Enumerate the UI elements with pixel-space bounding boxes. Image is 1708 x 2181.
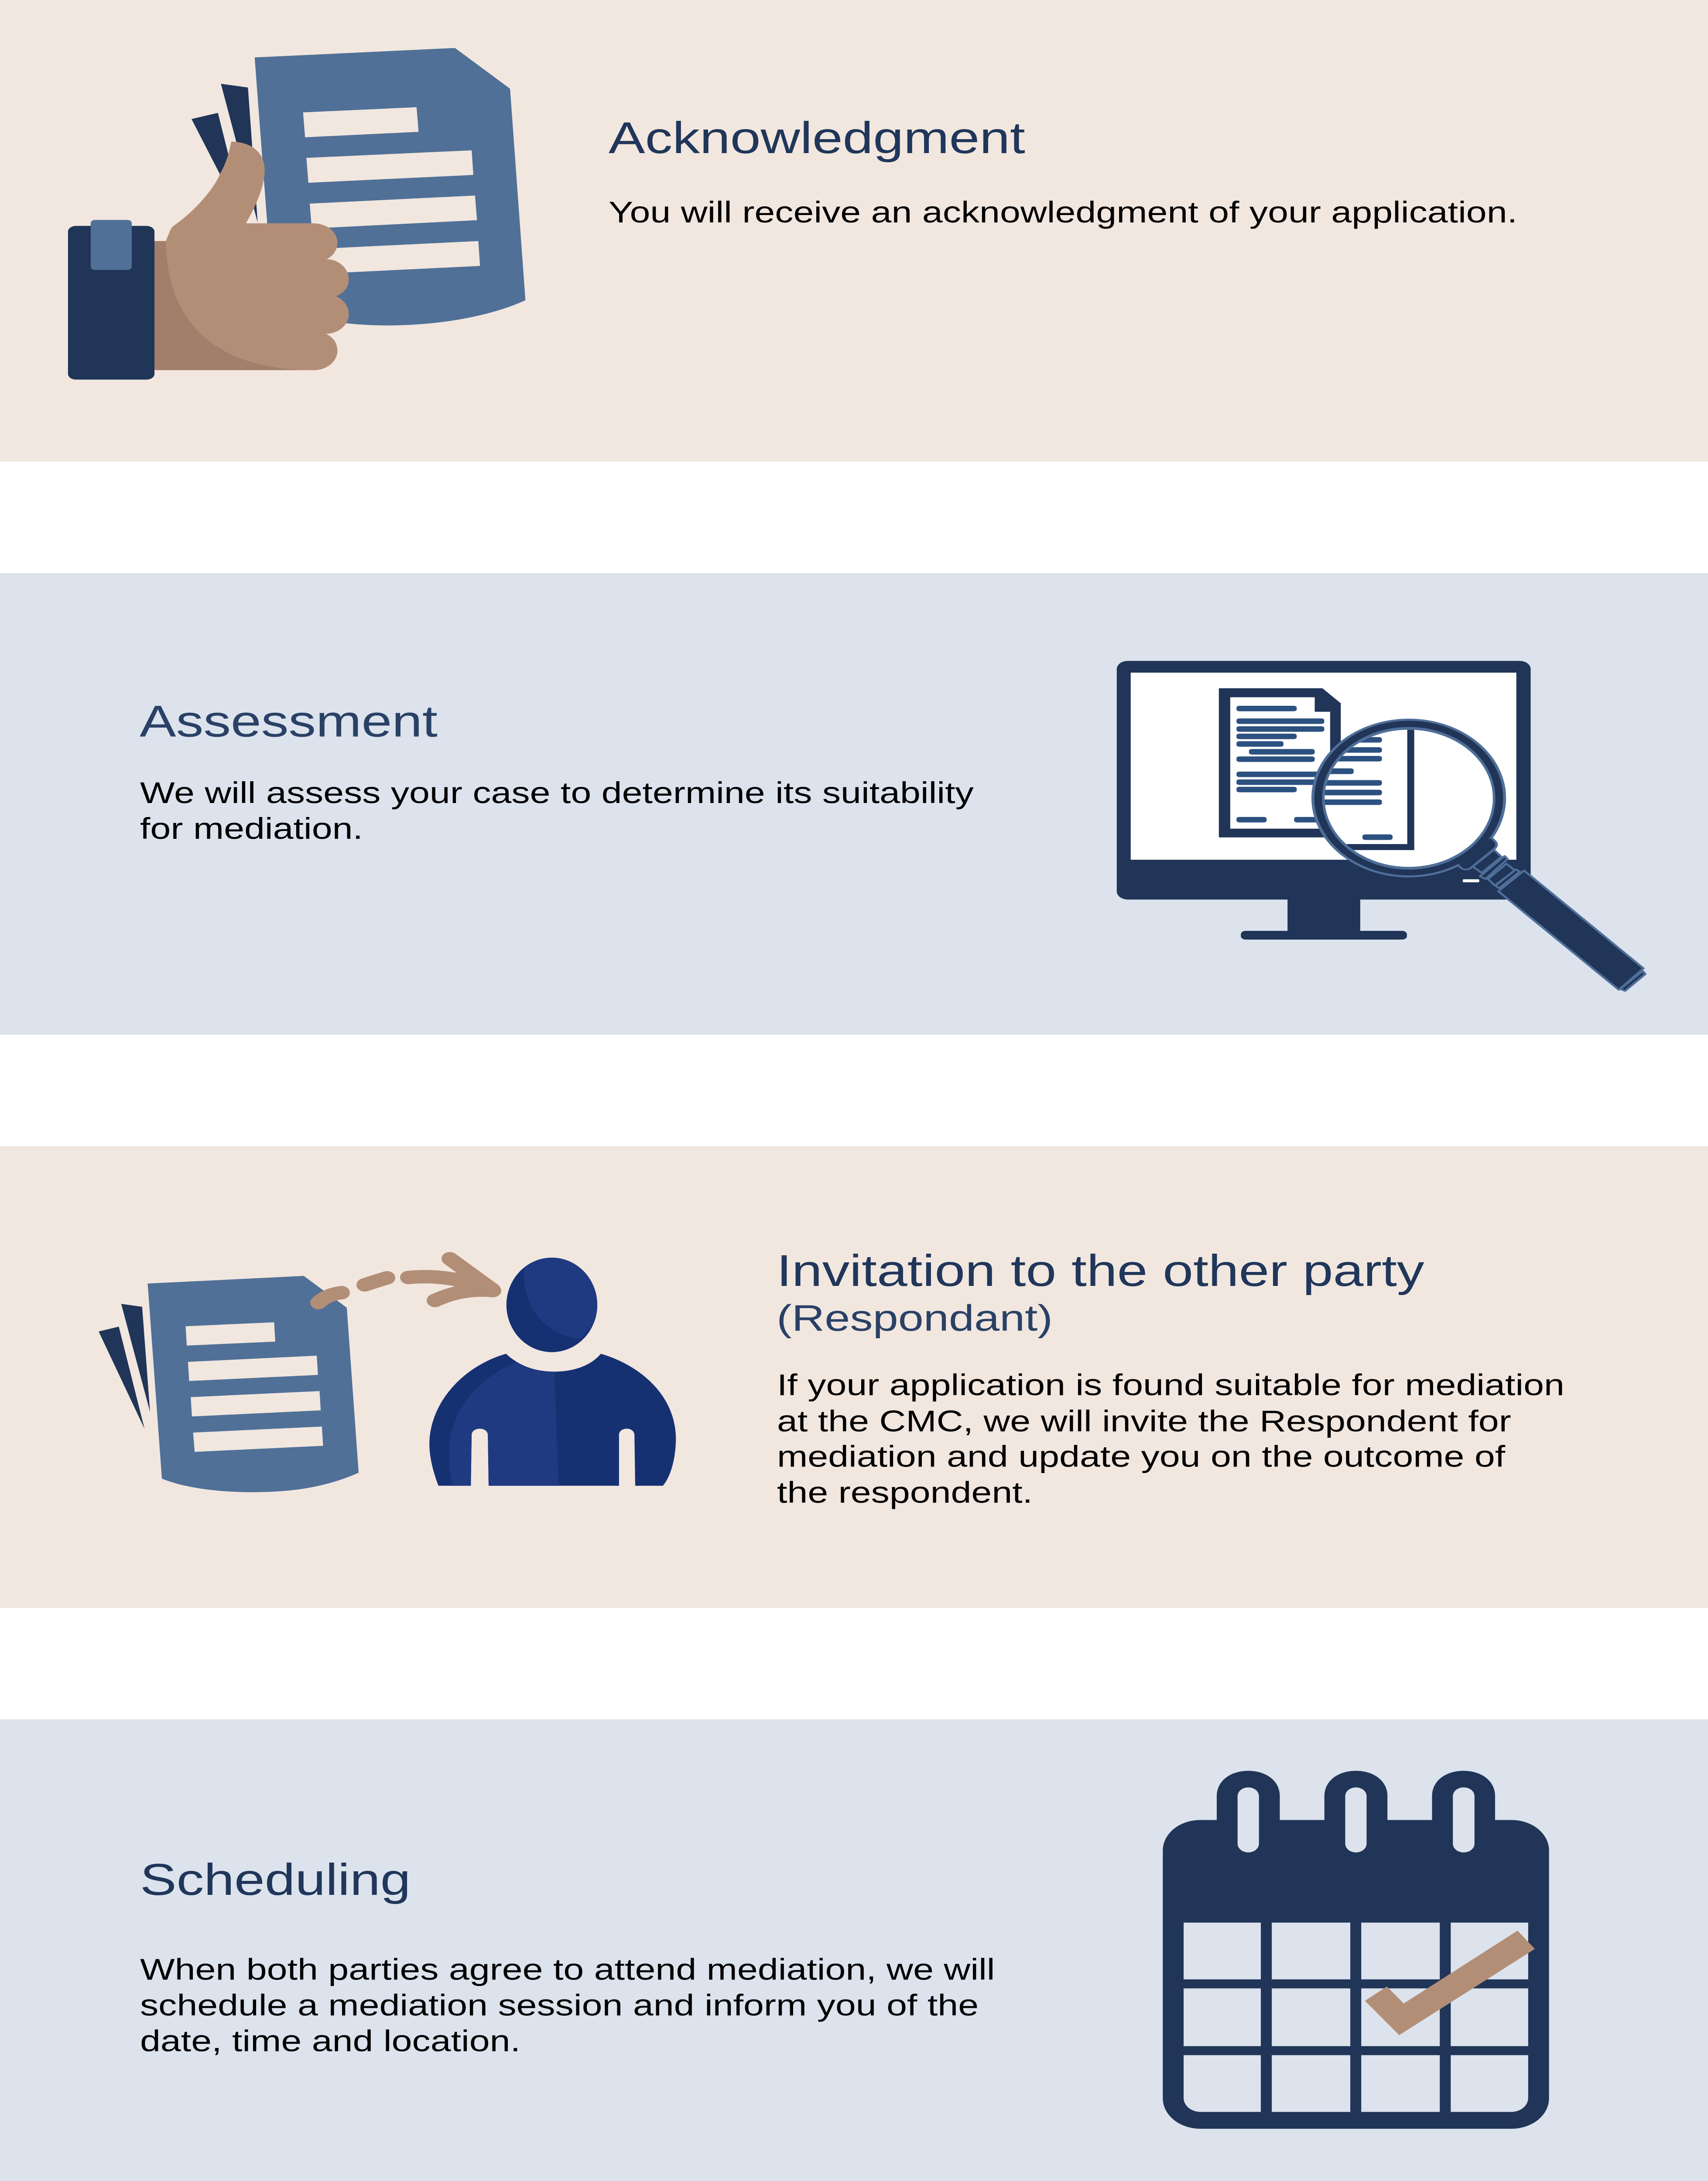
icon: document sent to person bbox=[99, 1252, 676, 1492]
text: scheduling description: When both parties agree to attend mediation, we will bbox=[140, 1953, 995, 1986]
panel: acknowledgment bbox=[0, 0, 1708, 461]
panel: assessment bbox=[0, 573, 1708, 1035]
heading: Assessment: Assessment bbox=[140, 697, 438, 746]
icon: calendar with check mark bbox=[1163, 1771, 1549, 2129]
icon: monitor with magnifying glass bbox=[1117, 661, 1645, 991]
text: invitation description: the respondent. bbox=[777, 1476, 1033, 1509]
icon: document bbox=[99, 1276, 359, 1492]
text: scheduling description: date, time and location. bbox=[140, 2024, 520, 2058]
arrow: dashed arrow to person bbox=[318, 1259, 493, 1302]
heading: Acknowledgment: Acknowledgment bbox=[609, 113, 1025, 163]
text: invitation description: mediation and update you on the outcome of bbox=[777, 1440, 1506, 1473]
text: assessment description: We will assess your case to determine its suitability bbox=[140, 776, 974, 810]
heading: Invitation to the other party: Invitation to the other party bbox=[777, 1246, 1424, 1296]
panel: scheduling bbox=[0, 1720, 1708, 2181]
panel: invitation to the other party bbox=[0, 1146, 1708, 1608]
heading: Scheduling: Scheduling bbox=[140, 1855, 411, 1904]
text: assessment description: for mediation. bbox=[140, 812, 363, 845]
text: invitation description: at the CMC, we will invite the Respondent for bbox=[777, 1405, 1511, 1438]
icon: person bbox=[429, 1252, 676, 1486]
text: acknowledgment description: You will receive an acknowledgment of your application. bbox=[609, 196, 1517, 229]
text: scheduling description: schedule a mediation session and inform you of the bbox=[140, 1989, 979, 2022]
subheading: Respondant: (Respondant) bbox=[777, 1298, 1053, 1339]
icon: thumbs up holding document bbox=[68, 48, 525, 379]
text: invitation description: If your application is found suitable for mediation bbox=[777, 1368, 1564, 1402]
